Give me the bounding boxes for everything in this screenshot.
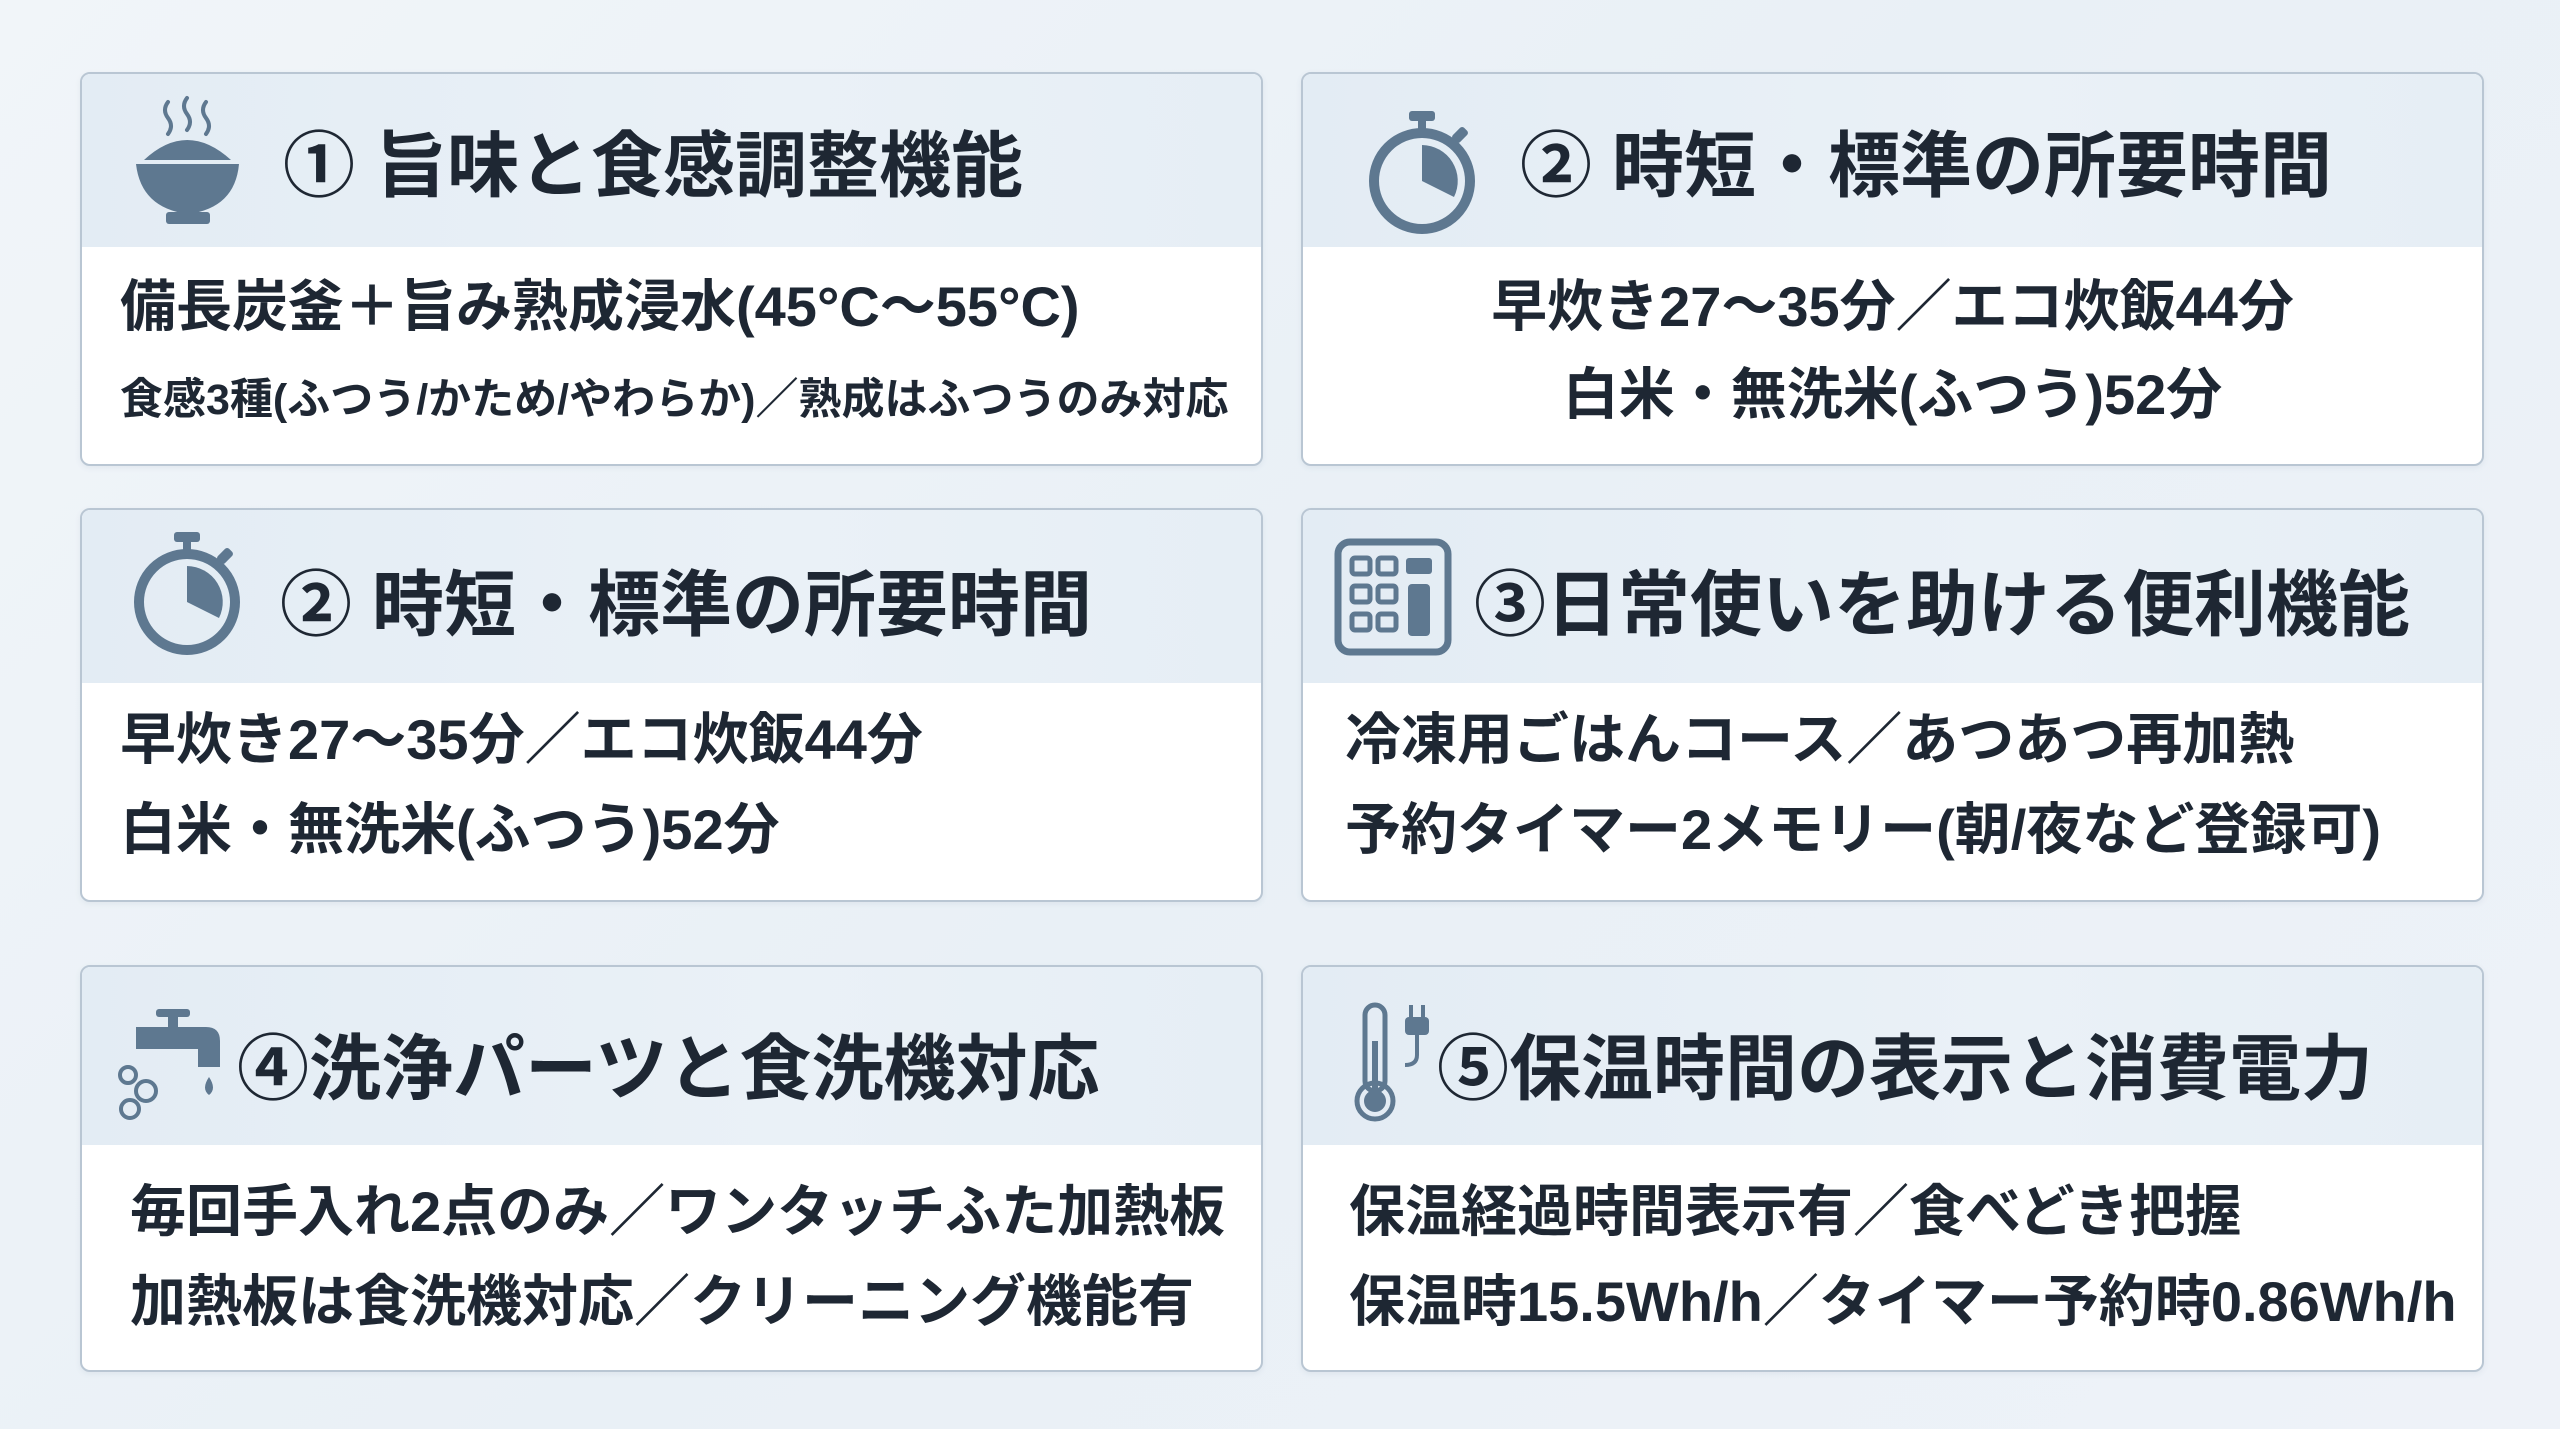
- heading: ① 旨味と食感調整機能: [283, 127, 1023, 207]
- panel: 時短・標準の所要時間 (top right): 早炊き27〜35分／エコ炊飯44分: [1491, 275, 2294, 338]
- panel: 時短・標準の所要時間 (middle left): 白米・無洗米(ふつう)52分: [120, 798, 780, 861]
- text block: [130, 1180, 1225, 1333]
- text block: [120, 708, 923, 861]
- icon: stopwatch: [1369, 111, 1475, 234]
- heading: ② 時短・標準の所要時間: [280, 566, 1092, 646]
- icon: thermometer and plug: [1354, 1002, 1429, 1122]
- panel: 洗浄パーツと食洗機対応: 毎回手入れ2点のみ／ワンタッチふた加熱板: [130, 1180, 1225, 1243]
- panel: 洗浄パーツと食洗機対応: 加熱板は食洗機対応／クリーニング機能有: [130, 1270, 1194, 1333]
- icon: stopwatch: [134, 532, 240, 655]
- text block: [1349, 1180, 2457, 1333]
- panel: 日常使いを助ける便利機能: 予約タイマー2メモリー(朝/夜など登録可): [1345, 798, 2381, 861]
- panel: 時短・標準の所要時間 (middle left): [80, 508, 1263, 902]
- icon: control panel: [1334, 538, 1452, 656]
- panel: 保温時間の表示と消費電力: 保温経過時間表示有／食べどき把握: [1349, 1180, 2241, 1243]
- heading: ④洗浄パーツと食洗機対応: [237, 1030, 1100, 1110]
- panel: 日常使いを助ける便利機能: 冷凍用ごはんコース／あつあつ再加熱: [1345, 708, 2294, 771]
- panel: 時短・標準の所要時間 (top right): [1301, 72, 2484, 466]
- panel: 保温時間の表示と消費電力: [1301, 965, 2484, 1372]
- icon: faucet: [118, 1009, 220, 1120]
- panel: 旨味と食感調整機能: 食感3種(ふつう/かため/やわらか)／熟成はふつうのみ対応: [120, 376, 1228, 424]
- panel: 旨味と食感調整機能: [80, 72, 1263, 466]
- heading: ③日常使いを助ける便利機能: [1474, 566, 2410, 646]
- panel: 時短・標準の所要時間 (middle left): 早炊き27〜35分／エコ炊飯44分: [120, 708, 923, 771]
- heading: ② 時短・標準の所要時間: [1520, 127, 2332, 207]
- panel: 洗浄パーツと食洗機対応: [80, 965, 1263, 1372]
- icon: rice bowl: [136, 96, 239, 224]
- panel: 保温時間の表示と消費電力: 保温時15.5Wh/h／タイマー予約時0.86Wh/h: [1349, 1270, 2457, 1333]
- panel: 日常使いを助ける便利機能: [1301, 508, 2484, 902]
- panel: 時短・標準の所要時間 (top right): 白米・無洗米(ふつう)52分: [1563, 363, 2222, 426]
- panel: 旨味と食感調整機能: 備長炭釜＋旨み熟成浸水(45°C〜55°C): [120, 275, 1080, 338]
- text block: [120, 275, 1228, 424]
- text block: [1345, 708, 2381, 861]
- text block: [1491, 275, 2294, 426]
- heading: ⑤保温時間の表示と消費電力: [1437, 1030, 2373, 1110]
